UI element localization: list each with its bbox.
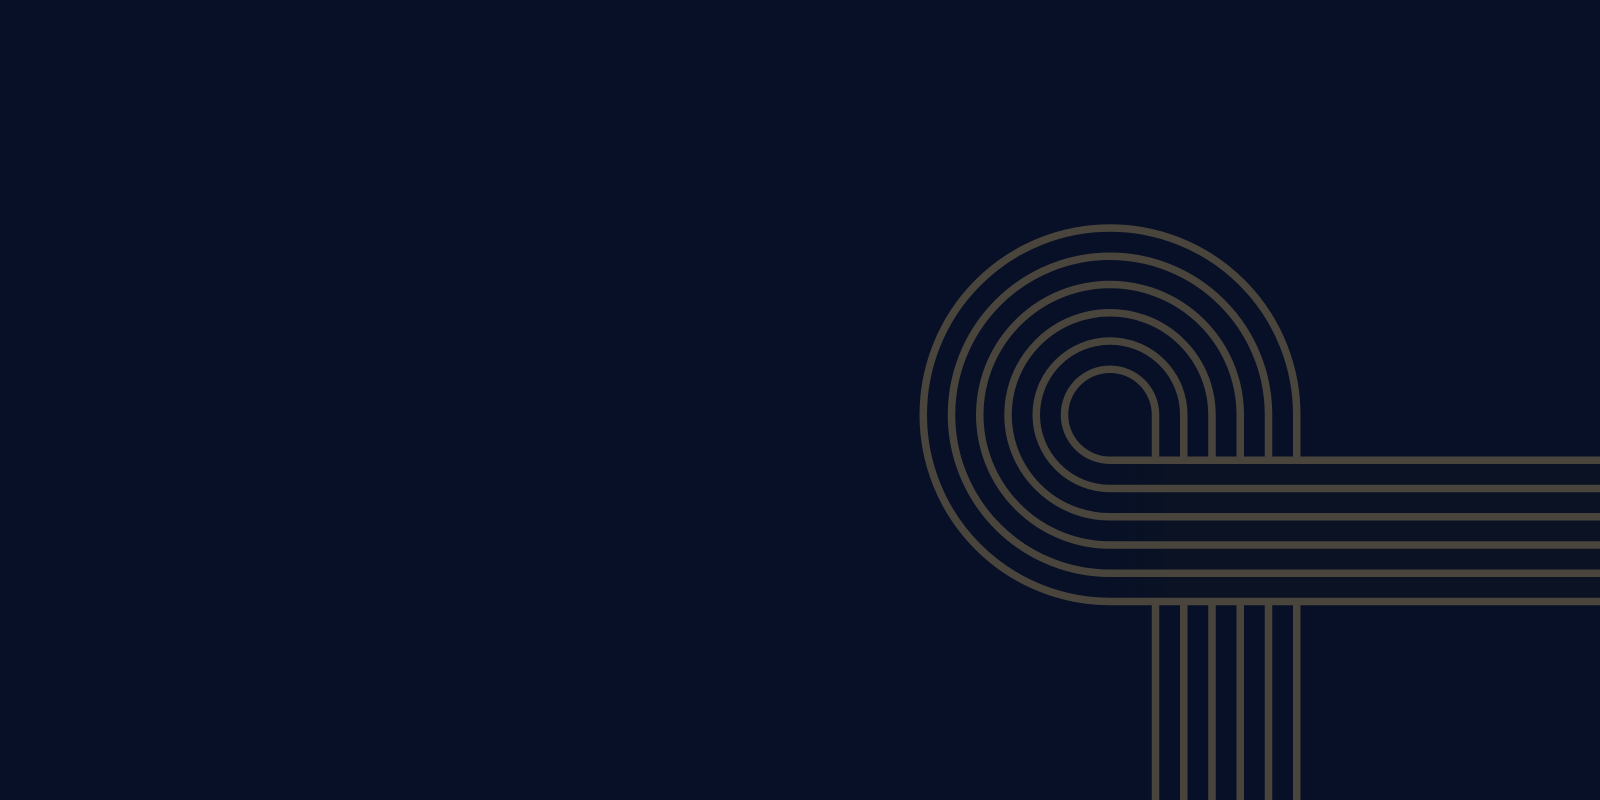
concentric rings flowing into horizontal lines — [923, 228, 1600, 602]
vertical line segments below the band — [1156, 601, 1297, 800]
band fill between the horizontal lines — [1100, 460, 1600, 601]
